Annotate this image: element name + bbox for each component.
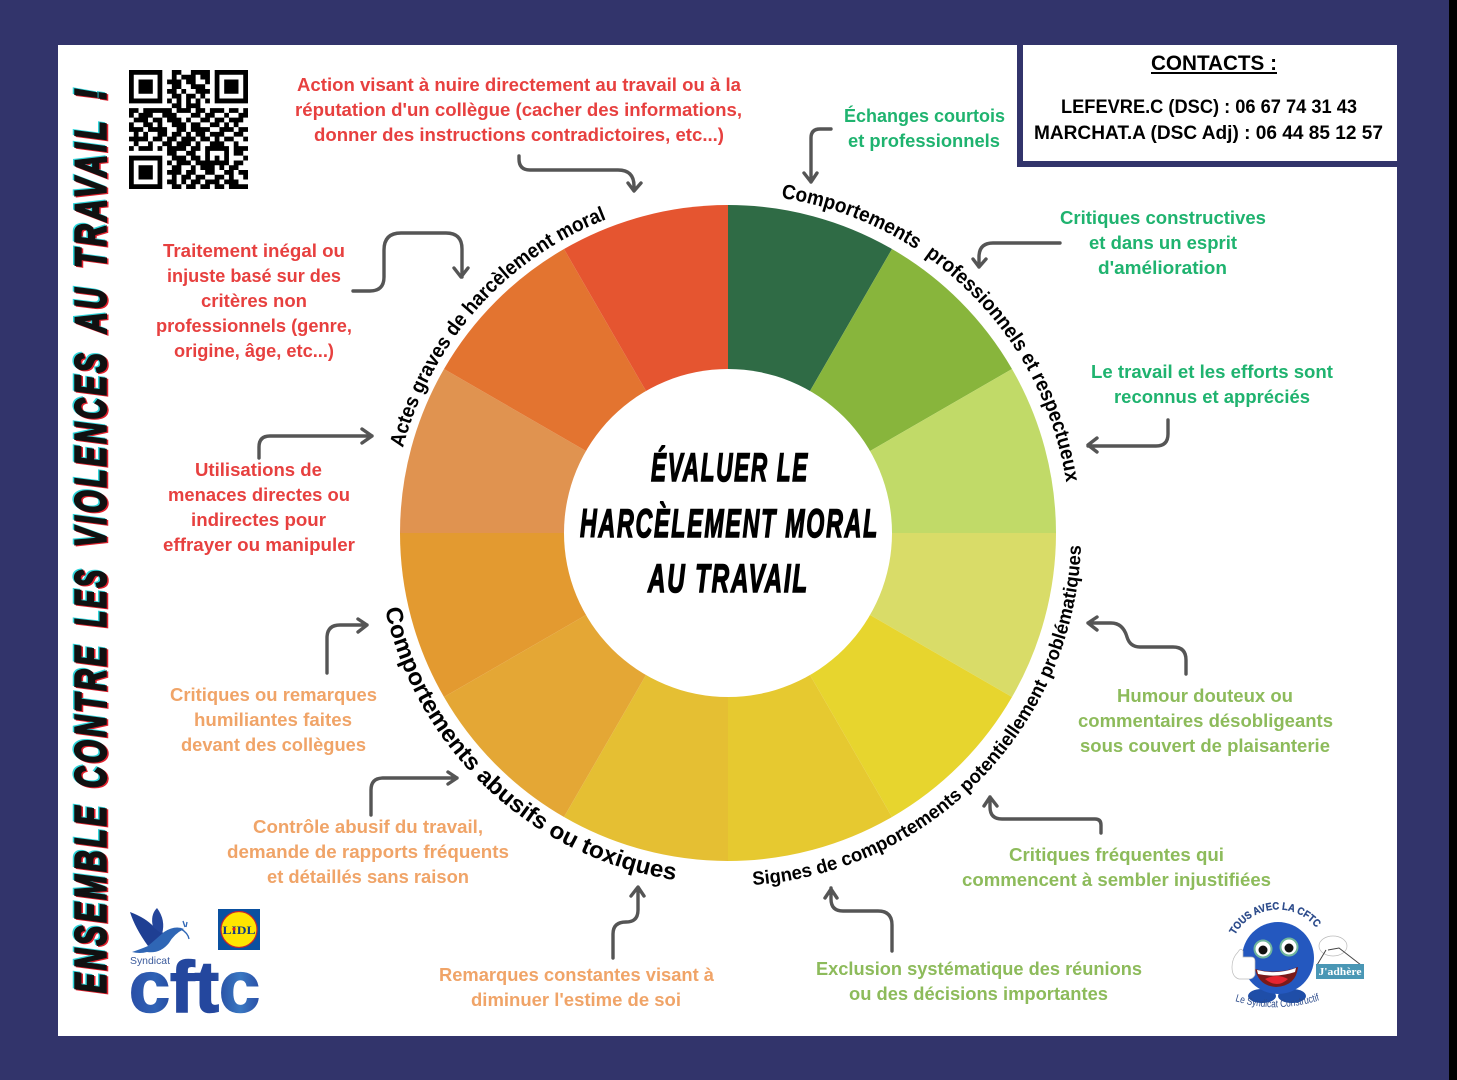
text: exclusion: Exclusion systématique des réunions	[816, 959, 1142, 979]
arrow: utilisations	[259, 429, 372, 458]
text: critiques frequentes	[962, 845, 1271, 890]
centre title: HARCÈLEMENT MORAL	[580, 501, 879, 546]
text: humour douteux: Humour douteux ou	[1117, 686, 1293, 706]
text: utilisations de menaces: Utilisations de	[195, 460, 322, 480]
text: echanges courtois: et professionnels	[848, 131, 1000, 151]
vertical slogan: VIOLENCES	[66, 350, 116, 547]
contacts box	[1017, 45, 1397, 167]
text: travail reconnu: Le travail et les efforts sont	[1091, 362, 1333, 382]
mascot: Le Syndicat Constructif	[1236, 992, 1319, 1008]
text: controle abusif	[227, 817, 509, 887]
text: exclusion	[816, 959, 1142, 1004]
text: action visant a nuire: donner des instructions contradictoires, etc...)	[314, 125, 724, 145]
logo: lidl: LIDL	[222, 923, 256, 937]
vertical slogan: LES	[66, 567, 116, 627]
text: critiques constructives: Critiques constructives	[1060, 208, 1266, 228]
text: action visant a nuire: réputation d'un collègue (cacher des informations,	[295, 100, 742, 120]
arrow: exclusion	[825, 888, 892, 951]
label: comportements abusifs: Comportements abusifs ou toxiques	[386, 608, 676, 880]
text: traitement inegal	[156, 241, 352, 361]
text: controle abusif: et détaillés sans raison	[267, 867, 469, 887]
contacts box: CONTACTS :	[1151, 51, 1277, 75]
text: critiques frequentes: Critiques fréquentes qui	[1009, 845, 1224, 865]
contacts box: LEFEVRE.C (DSC) : 06 67 74 31 43	[1061, 97, 1357, 118]
logo: cftc syndicat	[129, 908, 260, 1028]
text: controle abusif: Contrôle abusif du travail,	[253, 817, 483, 837]
vertical slogan: CONTRE	[66, 643, 116, 788]
centre title: ÉVALUER LE	[651, 445, 809, 490]
text: critiques humiliantes: humiliantes faites	[194, 710, 352, 730]
text: echanges courtois: Échanges courtois	[844, 105, 1005, 126]
arrow: critiques humiliantes	[327, 619, 367, 673]
text: echanges courtois	[844, 105, 1005, 151]
text: traitement inegal: origine, âge, etc...)	[174, 341, 334, 361]
text: action visant a nuire: Action visant à nuire directement au travail ou à la	[297, 75, 742, 95]
arrow: controle	[371, 772, 457, 815]
text: remarques constantes	[439, 965, 715, 1010]
text: traitement inegal: injuste basé sur des	[167, 266, 341, 286]
logo: lidl	[218, 909, 260, 950]
text: traitement inegal: professionnels (genre,	[156, 316, 352, 336]
text: travail reconnu	[1091, 362, 1333, 407]
text: travail reconnu: reconnus et appréciés	[1114, 387, 1310, 407]
text: humour douteux: commentaires désobligeants	[1078, 711, 1333, 731]
vertical slogan	[66, 85, 116, 993]
text: critiques constructives: et dans un esprit	[1089, 233, 1237, 253]
text: exclusion: ou des décisions importantes	[849, 984, 1108, 1004]
text: traitement inegal: Traitement inégal ou	[163, 241, 345, 261]
arrow: critiques constructives	[973, 243, 1060, 267]
text: utilisations de menaces: menaces directes ou	[168, 485, 350, 505]
text: action visant a nuire	[295, 75, 742, 145]
logo: cftc syndicat: cftc	[129, 948, 260, 1028]
centre title: AU TRAVAIL	[647, 557, 809, 601]
arrow: remarques	[613, 887, 644, 958]
contacts box: MARCHAT.A (DSC Adj) : 06 44 85 12 57	[1034, 123, 1383, 144]
arrow: critiques frequentes	[984, 797, 1101, 833]
text: humour douteux: sous couvert de plaisanterie	[1080, 736, 1330, 756]
text: critiques frequentes: commencent à sembler injustifiées	[962, 870, 1271, 890]
arrow: humour	[1088, 617, 1186, 674]
mascot	[1228, 902, 1364, 1008]
arrow: travail reconnu	[1088, 420, 1168, 452]
text: critiques humiliantes: Critiques ou remarques	[170, 685, 377, 705]
vertical slogan: TRAVAIL	[66, 118, 116, 268]
text: remarques constantes: diminuer l'estime de soi	[471, 990, 681, 1010]
vertical slogan: ENSEMBLE	[66, 803, 116, 993]
text: critiques constructives: d'amélioration	[1098, 258, 1227, 278]
label: comportements professionnels: Comportements professionnels et respectueux	[782, 184, 1077, 482]
text: traitement inegal: critères non	[201, 291, 307, 311]
text: controle abusif: demande de rapports fréquents	[227, 842, 509, 862]
label: signes: Signes de comportements potentiellement problématiques	[753, 546, 1082, 887]
vertical slogan: !	[66, 85, 116, 100]
arrow: traitement	[353, 233, 468, 291]
vertical slogan: AU	[66, 285, 116, 334]
centre title	[580, 445, 879, 601]
label: actes graves: Actes graves de harcèlement moral	[390, 206, 606, 448]
text: critiques humiliantes	[170, 685, 377, 755]
arrow: echanges	[804, 129, 831, 182]
logo: cftc syndicat: Syndicat	[130, 955, 170, 967]
text: utilisations de menaces: effrayer ou manipuler	[163, 535, 355, 555]
text: utilisations de menaces: indirectes pour	[191, 510, 326, 530]
text: remarques constantes: Remarques constantes visant à	[439, 965, 715, 985]
wheel chart	[400, 205, 1056, 861]
mascot: J'adhère	[1318, 967, 1362, 978]
text: utilisations de menaces	[163, 460, 355, 555]
mascot: TOUS AVEC LA CFTC	[1228, 902, 1321, 934]
text: critiques humiliantes: devant des collègues	[181, 735, 366, 755]
arrow: action	[519, 156, 641, 191]
text: humour douteux	[1078, 686, 1333, 756]
QR code	[129, 70, 248, 189]
text: critiques constructives	[1060, 208, 1266, 278]
